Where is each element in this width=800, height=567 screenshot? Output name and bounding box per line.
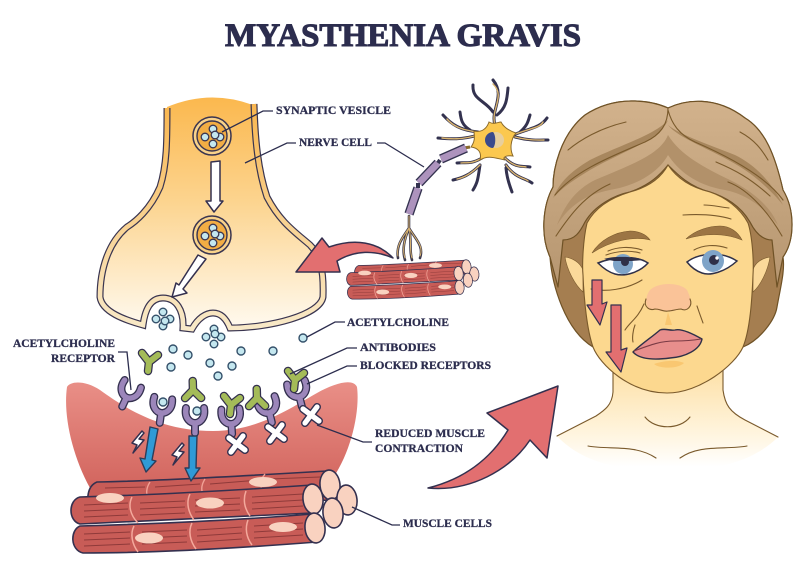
back hair <box>544 101 792 347</box>
nose <box>646 284 691 311</box>
eye lids <box>591 246 727 290</box>
face illustration <box>544 101 792 467</box>
neuron <box>398 80 548 260</box>
released acetylcholine clusters <box>152 308 307 380</box>
neck and shoulders <box>557 372 778 467</box>
antibodies <box>142 353 304 414</box>
labels: SYNAPTIC VESICLE <box>276 105 391 117</box>
nerve terminal <box>100 97 323 329</box>
lightning icons <box>132 431 184 465</box>
labels: REDUCED MUSCLE <box>375 428 485 440</box>
title: MYASTHENIA GRAVIS <box>225 18 581 54</box>
small muscle cells <box>347 259 480 299</box>
labels: ANTIBODIES <box>360 342 436 354</box>
receptors <box>114 380 311 435</box>
labels: CONTRACTION <box>375 443 464 455</box>
labels: ACETYLCHOLINE <box>13 338 115 350</box>
forehead wrinkles <box>683 205 731 219</box>
eyebrows <box>592 226 742 253</box>
muscle cells <box>71 469 359 553</box>
labels: MUSCLE CELLS <box>403 518 492 530</box>
large arrow to face <box>428 386 558 488</box>
hair bands <box>553 120 783 205</box>
muscle membrane <box>66 382 358 488</box>
lips <box>633 329 702 359</box>
labels: ACETYLCHOLINE <box>347 317 449 329</box>
vesicle top <box>193 117 231 155</box>
upper hair <box>544 101 792 287</box>
drooping arrows <box>587 280 627 372</box>
curved arrow to nerve terminal <box>296 238 393 272</box>
labels <box>13 105 492 530</box>
labels: NERVE CELL <box>299 137 372 149</box>
blocked X marks <box>229 407 319 452</box>
white arrow diagonal <box>172 255 206 297</box>
labels: RECEPTOR <box>51 353 116 365</box>
labels: BLOCKED RECEPTORS <box>360 360 491 372</box>
face shape <box>583 165 753 393</box>
right eye <box>687 254 737 274</box>
leader lines <box>118 111 424 525</box>
vesicle lower <box>193 216 231 254</box>
blue arrows <box>140 427 200 481</box>
cheek folds <box>625 304 703 342</box>
white arrow down <box>206 161 223 212</box>
bound acetylcholine <box>159 398 201 415</box>
left eye <box>598 258 648 275</box>
ears <box>565 257 583 292</box>
